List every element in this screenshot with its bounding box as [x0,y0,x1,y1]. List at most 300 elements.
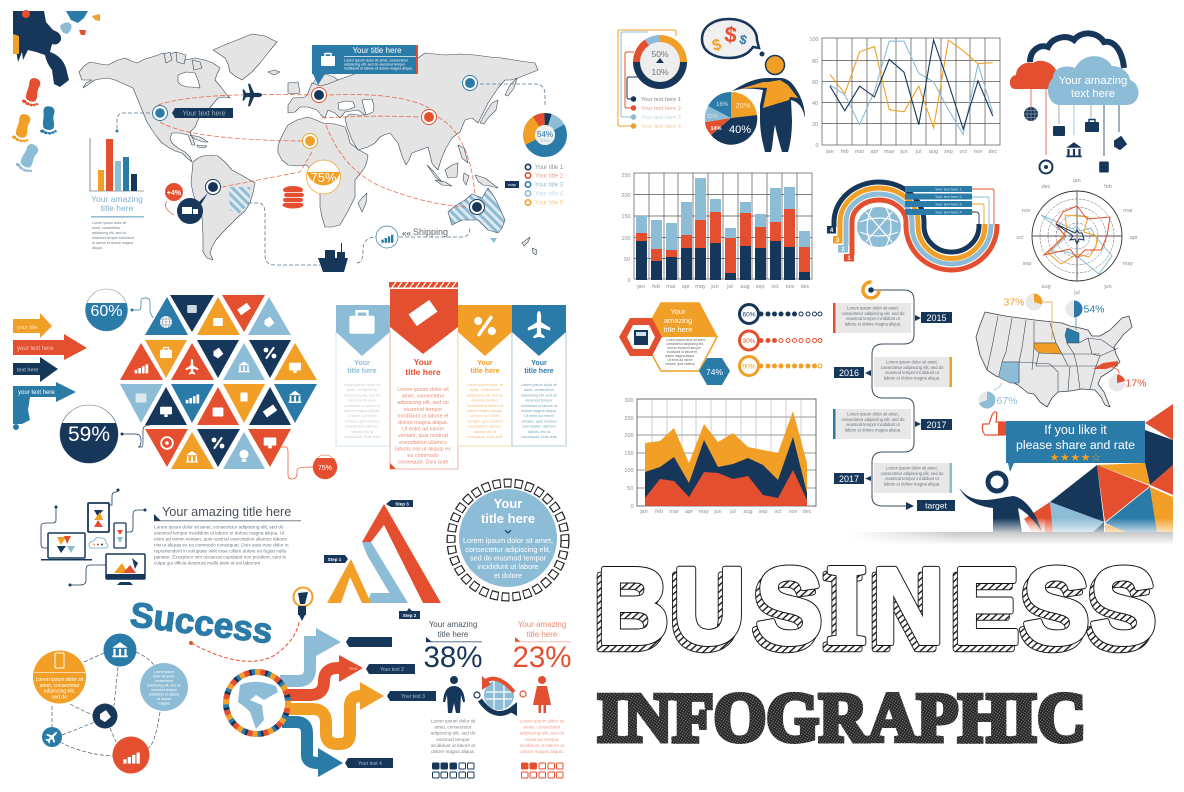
progress row: 30 percent: 30% [742,338,756,345]
hexagon title block: Ut enim ad minim [668,358,693,362]
callout: your text here [172,108,233,118]
timeline entry 2017 right: Lorem ipsum dolor sit amet, [847,412,899,416]
USA map percent callouts [978,294,1147,408]
arrow labels: Your text 3 [401,694,425,700]
hexagon title block: title here [664,325,692,334]
map: Eurasia [288,53,538,170]
panel: column 3: consequat. Duis aute [467,435,503,439]
globe [857,207,901,247]
target tag [917,500,955,511]
gauge: 59 percent: 59% [68,423,110,446]
cloud network [1010,33,1139,174]
radar chart: dec [1042,184,1051,190]
line chart: may [884,149,895,155]
stacked bar chart: 250 [621,173,631,179]
timeline entry 2015: 2015 [926,313,947,323]
panel: column 4: veniam, quis nostrud [521,419,557,423]
callout: your text here: Your text here [182,110,226,118]
step triangle logo [324,500,441,619]
panel: column 4: incididunt ut labore et [521,404,558,408]
bar chart: map [90,130,144,191]
panel: column 2: ea commodo [407,453,439,459]
stacked bar chart: 200 [621,193,631,199]
heading: your amazing title here: Your amazing title here [162,505,291,519]
stat: 38 percent male: incididunt ut labore et [431,743,476,748]
radar chart: may [1123,261,1133,267]
panel: column 2: title here [405,367,441,377]
circle: orange text: amet, consectetur [40,683,80,689]
timeline entry 2017 right: 2017 [926,420,947,430]
gauge: 75 percent [277,447,337,479]
hexagon icons [135,303,301,463]
callout: share and rate: If you like it [1044,423,1107,437]
business front outline: BUS [597,546,823,667]
hexagon title block: sed do eiusmod tempor [667,346,702,350]
line chart: feb [841,149,849,155]
heading: your amazing title here [154,505,301,566]
map: South America [191,155,255,260]
timeline entry 2016: eiusmod tempor incididunt ut [885,370,940,375]
text: amazing title under map chart: eiusmod tempor incididunt [92,236,134,240]
stat: 23 percent female: Your amazing [518,620,566,629]
business front face: NESS [872,546,1157,667]
panel: column 3: Lorem ipsum dolor sit [467,383,504,387]
thought bubble with dollars: $ [738,31,749,48]
pie chart: 20% [735,101,751,110]
stat: 23 percent female: 23% [512,641,572,674]
stacked bar chart: mar [666,284,676,290]
map: Caribbean [190,135,208,148]
stacked bar chart: oct [771,284,779,290]
radar chart: apr [1130,235,1138,241]
progress row: 90 percent: 90% [742,364,756,370]
map: Hudson bay [178,72,200,88]
stat: 23 percent female: Lorem ipsum dolor sit [520,718,565,724]
timeline entry 2016: consectetur adipiscing elit, sed do [881,365,944,370]
stat: 38 percent male: dolore magna aliqua. [431,749,475,754]
stat: 38 percent male: adipiscing elit, sed do [431,731,476,736]
radar chart: feb [1104,184,1112,190]
hexagon of triangles [120,295,317,469]
stacked bar chart: nov [786,284,795,290]
rainbow labels: 4 [830,228,834,234]
pie chart [705,92,757,145]
map: Britain [288,82,300,94]
icon: ship [318,243,348,272]
area chart: sep [759,509,767,515]
stacked bar chart: jun [710,284,719,290]
business hatched extrusion: NESS [868,552,1153,673]
icon: light bulb with dashed trail [189,588,312,661]
circle: light blue text [140,663,188,711]
icon: man [443,676,465,713]
progress row: 60 percent: 60% [742,312,756,318]
map: Africa [278,117,368,227]
text: amazing title under map chart: title here [101,203,134,213]
success word: Success [128,595,275,651]
circle: orange text: adipiscing elit, [44,689,75,695]
circle: light blue text: magna [158,702,170,706]
rainbow labels: Your text here 4 [935,210,962,214]
line chart: 40 [812,101,818,107]
rainbow labels: 3 [836,238,840,244]
gauge: 60 percent: 60% [90,303,123,320]
ring chart: 50 percent / 10 percent: Your text here 2 [641,106,681,112]
text: amazing title under map chart [91,194,144,250]
stacked bar chart: apr [682,284,690,290]
circle: your title here [451,483,565,597]
area chart: dec [803,509,812,515]
panel: column 2: Lorem ipsum dolor sit [397,387,449,393]
ring chart: 50 percent / 10 percent: Your text here 4 [641,124,681,130]
hexagon title block: veniam, quis nostrud [665,362,695,366]
circle: your title here: et dolore [494,571,522,580]
radar chart: jul [1073,290,1080,296]
radar chart: nov [1022,208,1031,214]
stat: 23 percent female: incididunt ut labore et [520,743,565,748]
business hatched extrusion: I [822,547,863,674]
circle: your title here: sed do eiusmod tempor [470,554,547,562]
timeline [833,282,955,511]
stat: 38 percent male: title here [438,630,469,639]
circle: light blue text: et dolore [157,697,171,701]
step triangle logo: Step 3 [395,502,409,506]
rainbow labels [827,186,972,262]
stat: 38 percent male: eiusmod tempor [436,737,470,742]
panel: column 4: adipiscing elit, sed do [521,393,557,397]
callout: map title [312,45,418,85]
callout: share and rate: ★★★★☆ [1050,452,1101,464]
map: Greenland [213,34,277,80]
rainbow labels: 1 [847,256,851,262]
text: amazing title under map chart: aliqua. [92,246,103,250]
arrow labels: Your text 4 [358,761,382,767]
panel: column 1: adipiscing elit, sed do [344,393,380,397]
circle: light blue text: eiusmod tempor [151,688,178,692]
left arrows: your title [17,325,38,331]
panel: column 4: eiusmod tempor [525,399,553,403]
circle: orange text: sed do [52,694,67,700]
hexagon title block [619,303,730,385]
panel shadow [850,532,1173,545]
panel: column 2: consequat. Duis aute [398,460,448,466]
icon: thumbs up [982,412,1006,435]
timeline entry 2017 left: labore et dolore magna aliqua. [884,481,940,486]
rainbow labels: Your text here 2 [935,195,962,199]
legend: donut chart: Your title 1 [535,165,564,171]
callout: 54 percent [1066,300,1105,330]
line chart: apr [870,149,879,155]
circle: orange text [33,650,86,704]
business outline of extrusion: NESS [868,552,1153,673]
circle: your title here: Lorem ipsum dolor sit amet, [463,536,553,545]
icon: woman [533,676,551,713]
panel: column 3: title here [470,368,500,375]
callout: map title: incididunt ut labore et dolore magna aliqua. [344,66,413,70]
step triangle logo: Step 1 [328,557,342,562]
timeline entry 2015: labore et dolore magna aliqua. [845,321,901,326]
timeline entry 2015: eiusmod tempor incididunt ut [846,316,901,321]
hexagon title block: consectetur adipiscing elit, [666,342,704,346]
panel: column 3: dolore magna aliqua. [467,409,503,413]
legend: donut chart [505,164,564,206]
circle: your title here: consectetur adipiscing elit, [465,545,551,554]
stacked bar chart: jan [636,284,645,290]
legend: donut chart: Your title 4 [535,192,564,198]
ring chart: 50 percent / 10 percent: Your text here 3 [641,115,681,121]
hexagon title block: amazing [664,316,692,325]
radar chart: aug [1041,284,1051,290]
business front outline: I [826,541,867,668]
panel: column 1: laboris nisi ut [351,430,374,434]
business hatched extrusion: BUS [593,552,819,673]
hexagon row 1 [145,295,291,335]
area chart: apr [685,509,693,515]
ring chart: 50 percent / 10 percent [618,30,687,130]
map: arctic islands [164,52,202,70]
thought bubble with dollars [702,19,764,58]
line chart: aug [929,149,938,155]
callout: 17 percent [1108,367,1147,392]
panel: column 2: Your [414,357,433,367]
donut chart: 54 percent [529,119,561,151]
line chart: 60 [812,80,818,86]
timeline entry 2016: 2016 [839,368,859,378]
stacked bar chart: feb [652,284,660,290]
circle: light blue text: consectetur [155,679,174,683]
panel: column 3: laboris nisi ut [474,430,497,434]
line chart: jul [915,149,922,155]
panel: column 1: veniam, quis nostrud [344,419,380,423]
panel: column 2: incididunt ut labore et [397,413,449,419]
donut chart: 54 percent: 54% [537,130,553,139]
stat: 23 percent female: amet, consectetur [523,725,561,730]
area chart: feb [655,509,663,515]
panel: column 2: dolore magna aliqua. [398,420,448,426]
line chart: jan [825,149,834,155]
USA map [976,312,1132,407]
icon: globe with cycle arrows [474,676,526,716]
line chart: dec [988,149,997,155]
area chart: 50 [627,486,633,492]
stat: 38 percent male: Your amazing [429,620,477,629]
stat: 23 percent female: adipiscing elit, sed do [520,731,565,736]
callout: map title: Your title here [352,46,402,55]
thought bubble with dollars: $ [723,22,738,48]
radar chart: oct [1016,235,1024,241]
rating squares: female [522,763,563,778]
rainbow S-curve [834,182,997,270]
target tag: target [925,500,947,510]
panel: column 1: dolore magna aliqua. [344,409,380,413]
pie chart: 16% [716,102,729,108]
pie chart: 40% [729,124,751,136]
circle: light blue text: adipiscing elit, sed do [147,684,181,688]
timeline entry 2015: Lorem ipsum dolor sit amet, [847,306,899,310]
hexagon title block: Your [670,307,686,316]
business outline of extrusion: BUS [593,552,819,673]
map: node markers [152,76,484,214]
text: amazing title under map chart: ut labore et dolore magna [92,241,133,245]
area chart: 300 [624,398,634,404]
arrow labels [345,637,436,768]
heading: your amazing title here: eiusmod tempor incididunt ut labore et dolore magna aliqua. Ut [154,530,285,536]
hexagon title block: Lorem ipsum dolor sit amet, [666,338,706,342]
stat: 23 percent female: dolore magna aliqua. [520,749,564,754]
legend: donut chart: Your title 3 [535,182,564,188]
icon: airplane [242,84,262,106]
area chart: 150 [624,451,634,457]
area chart: oct [774,509,782,515]
gauge: 75 percent: 75% [318,465,332,472]
text: amazing title under map chart: Your amazing [91,194,143,204]
business front outline: NESS [872,546,1157,667]
panel: column 1 [336,305,390,446]
panel: column 4: Your [531,360,547,367]
panel: column 4: Ut enim ad minim [524,414,554,418]
left arrows: your text here [17,346,54,352]
area chart: jun [713,509,722,515]
panel: column 1: exercitation ullamco [345,425,379,429]
timeline entry 2017 left [834,463,952,493]
map: Southeast Asia islands [427,145,498,188]
map: +4 percent and truck [165,183,208,224]
stacked bar chart: 150 [621,214,631,220]
legend: donut chart: map [508,182,517,187]
stat: 38 percent male: Lorem ipsum dolor sit [431,718,476,724]
ring chart: 50 percent / 10 percent: 50% [651,49,669,59]
callout: map title: Lorem ipsum dolor sit amet, consectetur [344,58,409,62]
panel: column 2 [389,282,458,469]
stacked bar chart: sep [756,284,764,290]
area chart: jul [729,509,736,515]
cloud: your amazing text here [1048,56,1139,105]
stat: 23 percent female [512,620,572,778]
panel: column 2: adipiscing elit, sed do [397,400,449,406]
pie chart: 14% [710,126,722,132]
shipping label: Shipping [413,227,448,237]
heading: your amazing title here: pariatur. Excepteur sint occaecat cupidatat non proident, sunt in [154,554,287,560]
hexagon title block: dolore magna aliqua. [665,354,695,358]
panel: column 2: Ut enim ad minim [402,427,444,433]
panel: column 4: exercitation ullamco [522,425,556,429]
globe with mosaic ring [226,672,288,734]
timeline entry 2017 left: eiusmod tempor incididunt ut [885,476,940,481]
line chart: 0 [815,143,819,149]
figure with head ring [959,473,1045,532]
map: 75 percent gauge [306,160,340,194]
panel: column 3: eiusmod tempor [471,399,499,403]
area chart: 250 [624,416,634,422]
rainbow labels: 2 [841,247,845,253]
progress dots [740,304,822,376]
arrow labels: Your text 2 [380,667,404,673]
map: Australia hatched [448,188,505,243]
map: North America [79,52,230,162]
panel: column 2: veniam, quis nostrud [398,433,448,439]
panel: column 1: Your [354,360,370,367]
text: amazing title under map chart: amet, consectetur [92,226,121,230]
callout: 67 percent [978,383,1018,408]
text: amazing title under map chart: adipiscing elit, sed do [92,231,126,235]
stacked bar chart: 50 [624,257,630,263]
left arrows: your text here [18,390,55,396]
heading: your amazing title here: enim ad minim veniam, quis nostrud exercitation ullamco laboris [154,536,288,542]
circle: orange text: Lorem ipsum dolor sit [36,677,84,683]
area chart: 0 [630,504,634,510]
rainbow labels: Your text here 1 [935,188,962,192]
map: Japan and Sakhalin [480,78,517,124]
stacked bar chart: dec [801,284,810,290]
growth arrows from globe [280,628,384,777]
radar chart: mar [1123,208,1133,214]
line chart: mar [855,149,864,155]
timeline entry 2017 left: 2017 [839,474,859,484]
area chart: nov [789,509,798,515]
map: Scandinavia [313,74,338,86]
panel: column 3: adipiscing elit, sed do [467,393,503,397]
map: Brazil hatched [229,187,250,215]
area chart: 100 [624,468,634,474]
callout: 17 percent: 17% [1125,378,1147,390]
area chart: 200 [624,433,634,439]
panel: column 4: Lorem ipsum dolor sit [521,383,558,387]
panel: column 3: Ut enim ad minim [470,414,500,418]
devices network [41,488,146,586]
world map [79,34,538,260]
panel: column 2: eiusmod tempor [404,407,443,413]
stat: 23 percent female: title here [527,630,558,639]
timeline entry 2016: labore et dolore magna aliqua. [884,375,940,380]
radar chart: sep [1023,261,1031,267]
panel: column 4 [512,305,566,446]
ink splashes and footprints [11,10,100,175]
stacked bar chart: jul [726,284,733,290]
callout: 37 percent [1003,294,1052,340]
circle: light blue text: Lorem ipsum [154,670,174,674]
stat: 23 percent female: eiusmod tempor [525,737,559,742]
gauge: 60 percent [86,289,153,331]
ring chart: 50 percent / 10 percent: 10% [651,67,669,77]
panel: share and rate triangles [1022,404,1173,532]
business front face: I [826,541,867,668]
panel: column 2: laboris nisi ut aliquip ex [395,446,451,452]
timeline entry 2017 right: labore et dolore magna aliqua. [845,427,901,432]
stat: 38 percent male: amet, consectetur [434,725,472,730]
timeline entry 2017 right [833,409,952,439]
line chart: sep [944,149,953,155]
panel: column 3: incididunt ut labore et [467,404,504,408]
area chart: mar [669,509,679,515]
text: amazing title under map chart: Lorem ipsum dolor sit [92,221,126,225]
donut chart: 54 percent: TITLE [540,139,550,143]
stacked bar chart: 100 [621,236,631,242]
radar chart: jun [1103,284,1112,290]
circle: your title here: title here [481,511,535,526]
panel: column 4: title here [524,368,554,375]
stacked bar chart: aug [740,284,750,290]
panel: column 3: Your [477,360,493,367]
radar chart [1016,178,1138,296]
callout: 67 percent: 67% [996,395,1018,407]
callout: 37 percent: 37% [1003,296,1025,308]
shipping label: «« [402,229,411,238]
map: Madagascar [358,193,367,212]
icon: coin stack [282,186,304,208]
panel: column 3: veniam, quis nostrud [467,419,503,423]
network of circles [33,634,188,774]
panel: column 3: amet, consectetur [470,388,501,392]
